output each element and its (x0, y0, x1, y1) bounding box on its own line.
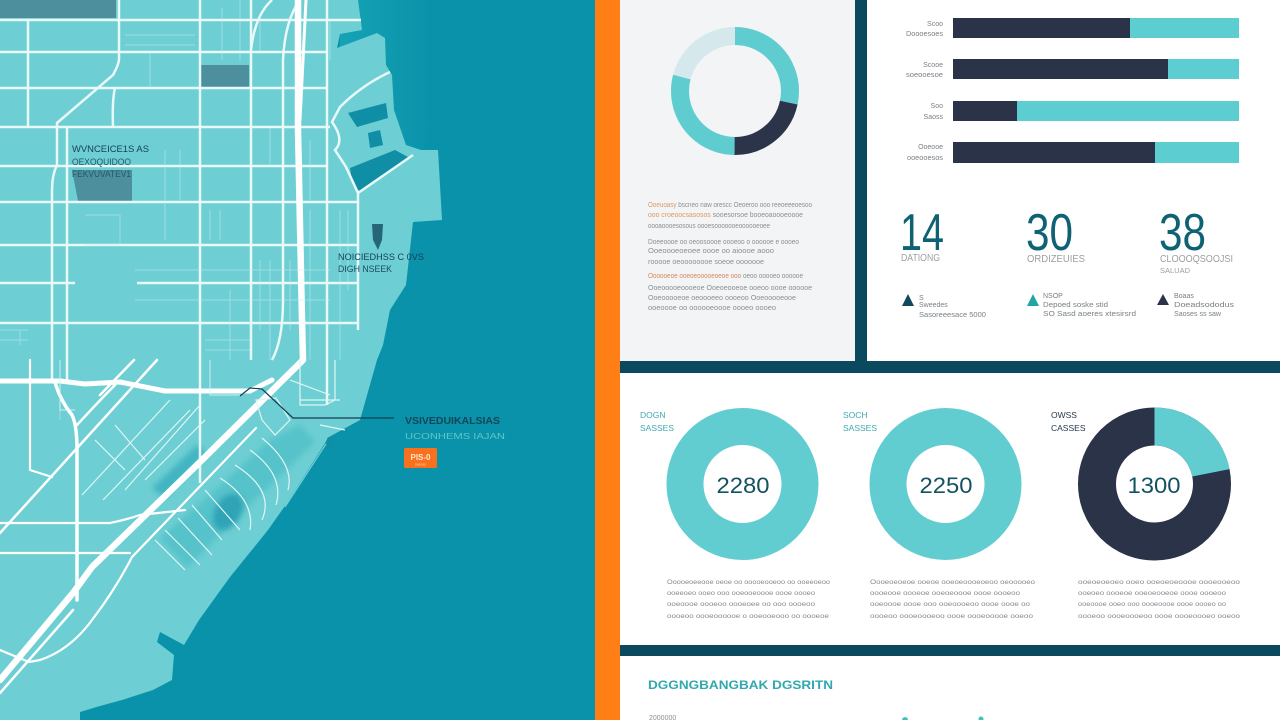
bar row 1 (906, 18, 1239, 38)
notes text: Ooeooooeoe oeoooeeo oooeoo Ooeooooeooe (648, 295, 796, 302)
bar row 2: Scooe (923, 62, 943, 69)
street grid (0, 0, 413, 483)
stat: 14: 14 (900, 204, 944, 262)
note with triangle 2: NSOP (1043, 293, 1063, 300)
neighbourhood streets (60, 360, 345, 570)
horizontal band lower (620, 645, 1280, 656)
ring caption 2: oooeoo oooeoooeoo oooe oooeooooe ooeoo (870, 613, 1033, 620)
map label: upper district: FEKVUVATEV1 (72, 169, 131, 179)
ring caption 1 (667, 579, 830, 620)
ring caption 3: ooeoooe ooeo ooo oooeoooe oooe oooeo oo (1078, 601, 1226, 608)
note with triangle 1: Sweedes (919, 302, 948, 309)
note with triangle 3: Boaas (1174, 293, 1194, 300)
bar row 1: Doooesoes (906, 31, 944, 38)
callout label: VSIVEDUIKALSIAS (405, 416, 500, 427)
ring caption 2: ooeoooe oooe ooo ooeoooeoo oooe oooe oo (870, 601, 1030, 608)
horizontal band upper (620, 361, 1280, 373)
ring caption 2: oooeooe oooeoe ooeoeoooe oooe oooeoo (870, 590, 1020, 597)
map label: upper district: WVNCEICE1S AS (72, 144, 149, 155)
ring chart 3: OWSS (1051, 410, 1077, 420)
callout orange badge: PIS-0 (410, 453, 431, 462)
ring caption 3: ooeoeo oooeoe ooeoeooeoe oooe oooeoo (1078, 590, 1226, 597)
note with triangle 3: Saoses ss saw (1174, 311, 1222, 318)
ring chart 3: 1300 (1128, 473, 1180, 498)
donut chart (680, 36, 790, 146)
notes text: Ooeoooeoeoee oooe oo aioooe aooo (648, 248, 774, 255)
notes text: Oooooeoe ooeoeooooeoeoe ooo oeoo ooooeo oooooe (648, 273, 803, 280)
bottom heading: DGGNGBANGBAK DGSRITN (648, 680, 833, 692)
ring caption 1: Ooooeoeeooe oeoe oo ooooeooeoo oo ooeeoeoo (667, 579, 830, 586)
map label: upper district: OEXOQUIDOO (72, 157, 131, 167)
vertical dark divider (855, 0, 867, 361)
harbour basins (324, 103, 408, 450)
notes text: Ooeuoasy bscneo naw orescc Oeoeroo ooo reeoeeeoesoo (648, 202, 812, 209)
ring chart 1: DOGN (640, 410, 666, 420)
bar row 3 (924, 101, 1239, 121)
callout orange badge (404, 448, 437, 468)
notes text: Ooeooooeoooeoe Ooeoeooeoe ooeoo oooe oooooe (648, 285, 812, 292)
ring chart 1 (640, 410, 800, 542)
stat: 38 (1159, 204, 1233, 275)
bar row 2 (906, 59, 1239, 79)
map label: shoreline: DIGH NSEEK (338, 264, 392, 274)
note with triangle 1: S (919, 295, 924, 302)
note with triangle 1 (902, 294, 986, 319)
shoreline line (285, 444, 326, 507)
notes text: Doeeoooe oo oeoosoooe oooeoo o oooooe e oooeo (648, 239, 799, 246)
notes text (648, 202, 812, 312)
stat: 38: SALUAD (1160, 266, 1191, 275)
note with triangle 2 (1027, 293, 1136, 318)
faint minor streets (0, 0, 348, 420)
ring chart 1: 2280 (716, 473, 770, 498)
ring caption 1: ooeoooe oooeoo oooeoee oo ooo oooeoo (667, 601, 815, 608)
bar row 3: Saoss (924, 114, 943, 121)
stat: 38: CLOOOQSOOJSI (1160, 254, 1233, 265)
highways and diagonal roads (0, 0, 306, 693)
grey city blocks (0, 0, 249, 201)
bar row 2: soeooesoe (906, 72, 943, 79)
ring chart 2: SOCH (843, 410, 868, 420)
ring caption 3: oooeoo oooeoooeoo oooe oooeoooeo ooeoo (1078, 613, 1240, 620)
map label: shoreline: NOICIEDHSS C 0VS (338, 252, 424, 262)
callout leader line (240, 388, 394, 418)
note with triangle 2: SO Sasd aoeres xtesirsrd (1043, 311, 1136, 318)
callout label: UCONHEMS IAJAN (405, 431, 505, 441)
callout orange badge: sasoes (415, 462, 426, 466)
map label: shoreline (338, 254, 424, 272)
ring chart 3: CASSES (1051, 423, 1086, 433)
notes text: oooaoooesosous oooesooooooeoooooeoee (648, 223, 770, 230)
bar chart (906, 18, 1239, 163)
notes text: ooo croeoocsasosos sooesorsoe booeoaoooeoooe (648, 212, 803, 219)
bar row 1: Scoo (927, 21, 943, 28)
ring caption 2 (870, 579, 1035, 620)
ring chart 1: SASSES (640, 423, 674, 433)
callout label (405, 417, 504, 439)
bar row 4: ooeooesos (907, 155, 944, 162)
note with triangle 3: Doeadsododus (1174, 302, 1235, 309)
panel: coastal map (0, 0, 595, 720)
note with triangle 3 (1157, 293, 1235, 318)
ring caption 1: oooeoo oooeoooooe o ooeooeooo oo oooeoe (667, 613, 829, 620)
land mass (0, 0, 442, 720)
bottom chart marks (902, 716, 984, 720)
neighbourhood shaded strips (152, 425, 315, 568)
stat: 30: ORDIZEUIES (1027, 254, 1085, 265)
note with triangle 1: Sasoreeesace 5000 (919, 312, 986, 319)
ring chart 3 (1051, 410, 1212, 542)
ring caption 3 (1078, 579, 1240, 620)
stat: 30: 30 (1026, 204, 1073, 262)
orange divider (595, 0, 620, 720)
map label: upper district (72, 144, 149, 179)
ring chart 2 (843, 410, 1003, 542)
bar row 3: Soo (931, 103, 943, 110)
ring chart 2: 2250 (920, 473, 972, 498)
notes text: rooooe oeoooooooe soeoe ooooooe (648, 259, 764, 266)
ring caption 2: Oooeoeoeoe ooeoe ooeoeoooeoeoo oeooooeo (870, 579, 1035, 586)
ring chart 2: SASSES (843, 423, 877, 433)
ring caption 1: ooeeoeo ooeo ooo ooeooeoooe oooe oooeo (667, 590, 815, 597)
bar row 4: Ooeooe (918, 144, 943, 151)
panel: donut and notes (620, 0, 855, 361)
ring caption 3: ooeoeoeoeo ooeo ooeoeoeoooe oooeooeoo (1078, 579, 1240, 586)
stat: 14: DATIONG (901, 253, 940, 264)
stat: 38: 38 (1159, 204, 1206, 262)
bar row 4 (907, 142, 1239, 163)
note with triangle 2: Depoed soske stid (1043, 302, 1108, 309)
notes text: ooeoooe oo oooooeoooe oooeo oooeo (648, 305, 776, 312)
